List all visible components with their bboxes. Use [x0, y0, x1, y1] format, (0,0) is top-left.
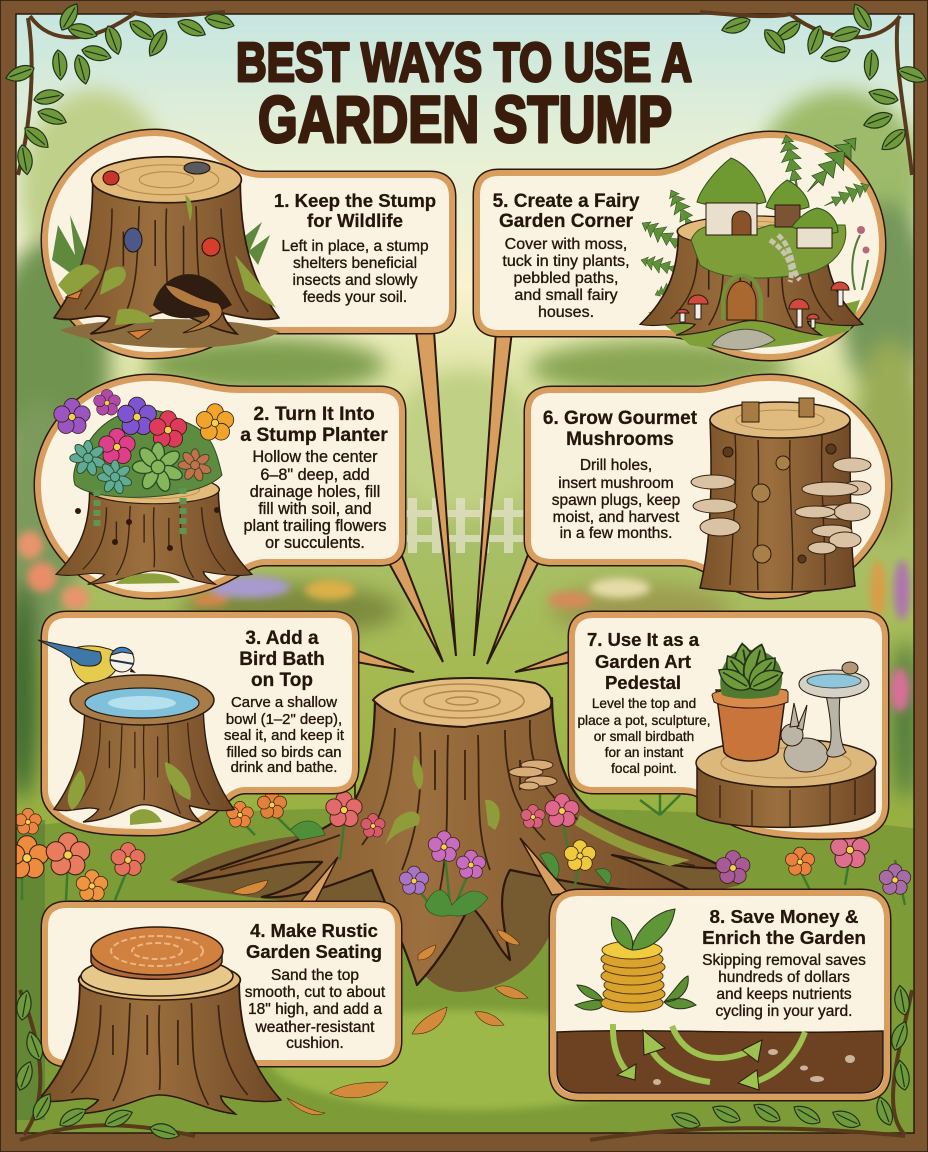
illustration: planter stump — [54, 389, 252, 584]
text 2: 6–8" deep, add — [260, 466, 370, 484]
title: GARDEN STUMP — [258, 82, 672, 156]
bubble 2 — [38, 378, 402, 595]
text 1: for Wildlife — [307, 210, 403, 231]
text 1: 1. Keep the Stump — [274, 190, 436, 211]
text 5: and small fairy — [514, 287, 618, 304]
text 3: Carve a shallow — [231, 695, 337, 711]
text 5: houses. — [538, 304, 594, 321]
text 2 — [240, 403, 388, 552]
text 5: Garden Corner — [499, 211, 634, 232]
text 4: smooth, cut to about — [245, 984, 386, 1001]
meadow flowers and fallen leaves — [5, 785, 911, 1115]
panel: 3 bird bath — [38, 615, 355, 832]
text 3: bowl (1–2" deep), — [226, 712, 342, 728]
pointer 8 — [520, 838, 568, 895]
panel: 6 gourmet mushrooms — [528, 378, 888, 595]
text 1 — [274, 190, 436, 306]
central stump — [178, 678, 725, 985]
text 4: 18" high, and add a — [248, 1001, 382, 1018]
text 3: drink and bathe. — [231, 760, 337, 776]
text 5: tuck in tiny plants, — [502, 253, 630, 270]
text 8: 8. Save Money & — [709, 907, 859, 928]
text 7: focal point. — [611, 761, 677, 776]
text 2: plant trailing flowers — [243, 517, 387, 535]
text 1: Left in place, a stump — [281, 238, 429, 255]
panel: 4 rustic seating — [38, 857, 398, 1114]
text 6: spawn plugs, keep — [552, 492, 680, 509]
text 6: in a few months. — [560, 525, 672, 542]
illustration: mushroom log — [691, 398, 871, 592]
text 2: drainage holes, fill — [250, 483, 380, 501]
panel: 5 fairy garden — [477, 130, 882, 357]
text 7: or small birdbath — [594, 729, 694, 744]
text 2: 2. Turn It Into — [253, 403, 375, 425]
text 3: seal it, and keep it — [224, 728, 345, 744]
text 3: filled so birds can — [226, 745, 342, 761]
text 3: on Top — [251, 670, 313, 691]
bubble 8 — [553, 893, 887, 1097]
title: BEST WAYS TO USE A — [236, 31, 692, 93]
text 5 — [493, 191, 640, 321]
bubble 1 — [45, 133, 452, 355]
text 4: cushion. — [286, 1035, 344, 1052]
panel: 7 art pedestal — [572, 615, 885, 836]
text 2: a Stump Planter — [240, 424, 388, 446]
text 6: Drill holes, — [580, 457, 652, 474]
text 8: and keeps nutrients — [716, 986, 852, 1003]
text 4: weather-resistant — [255, 1019, 375, 1036]
text 3 — [224, 628, 345, 776]
text 2: Hollow the center — [252, 448, 378, 466]
panel: 8 save money — [520, 838, 887, 1097]
text 8: Skipping removal saves — [702, 952, 866, 969]
text 8: Enrich the Garden — [702, 928, 866, 949]
icon: stack of coins with leaves — [575, 909, 696, 1012]
text 7: 7. Use It as a — [587, 629, 700, 650]
bubble 3 — [45, 615, 355, 832]
text 4 — [245, 920, 386, 1052]
text 3: Bird Bath — [239, 649, 325, 670]
text 4: Garden Seating — [246, 941, 382, 962]
illustration: wildlife stump — [52, 157, 280, 348]
pointer 4 — [298, 857, 338, 905]
text 1: insects and slowly — [293, 272, 418, 289]
title — [236, 31, 692, 156]
text 1: shelters beneficial — [293, 255, 417, 272]
text 6: Mushrooms — [566, 429, 674, 450]
illustration: fairy garden stump — [638, 130, 873, 350]
text 7: Pedestal — [605, 672, 681, 693]
text 6 — [543, 408, 698, 542]
text 4: Sand the top — [271, 967, 359, 984]
text 6: 6. Grow Gourmet — [543, 408, 698, 429]
text 5: Cover with moss, — [505, 236, 627, 253]
text 2: fill with soil, and — [258, 500, 372, 518]
text 8: cycling in your yard. — [716, 1003, 852, 1020]
text 2: or succulents. — [265, 534, 365, 552]
illustration: soil with nutrient arrows — [557, 1024, 883, 1093]
text 3: 3. Add a — [245, 628, 319, 649]
bubble 7 — [572, 615, 885, 836]
text 6: insert mushroom — [558, 475, 674, 492]
decorative fence — [402, 498, 532, 553]
illustration: bird bath stump — [38, 640, 234, 825]
panel: 1 keep the stump for wildlife — [45, 133, 452, 355]
text 7: Level the top and — [592, 696, 696, 711]
illustration: pedestal with pot, rabbit and birdbath — [696, 642, 876, 828]
text 8: hundreds of dollars — [718, 969, 850, 986]
text 7: for an instant — [605, 745, 684, 760]
text 7 — [578, 629, 710, 776]
callout pointers — [356, 331, 573, 672]
text 4: 4. Make Rustic — [250, 920, 378, 941]
text 5: 5. Create a Fairy — [493, 191, 640, 212]
illustration: stump seat — [38, 927, 281, 1114]
text 1: feeds your soil. — [303, 289, 407, 306]
text 7: place a pot, sculpture, — [578, 713, 710, 728]
text 7: Garden Art — [595, 651, 691, 672]
panel: 2 stump planter — [38, 378, 402, 595]
bubble 5 — [477, 135, 882, 357]
text 6: moist, and harvest — [553, 509, 680, 526]
bubble 4 — [45, 905, 398, 1063]
text 8 — [702, 907, 866, 1020]
text 5: pebbled paths, — [514, 270, 618, 287]
bubble 6 — [528, 378, 888, 595]
